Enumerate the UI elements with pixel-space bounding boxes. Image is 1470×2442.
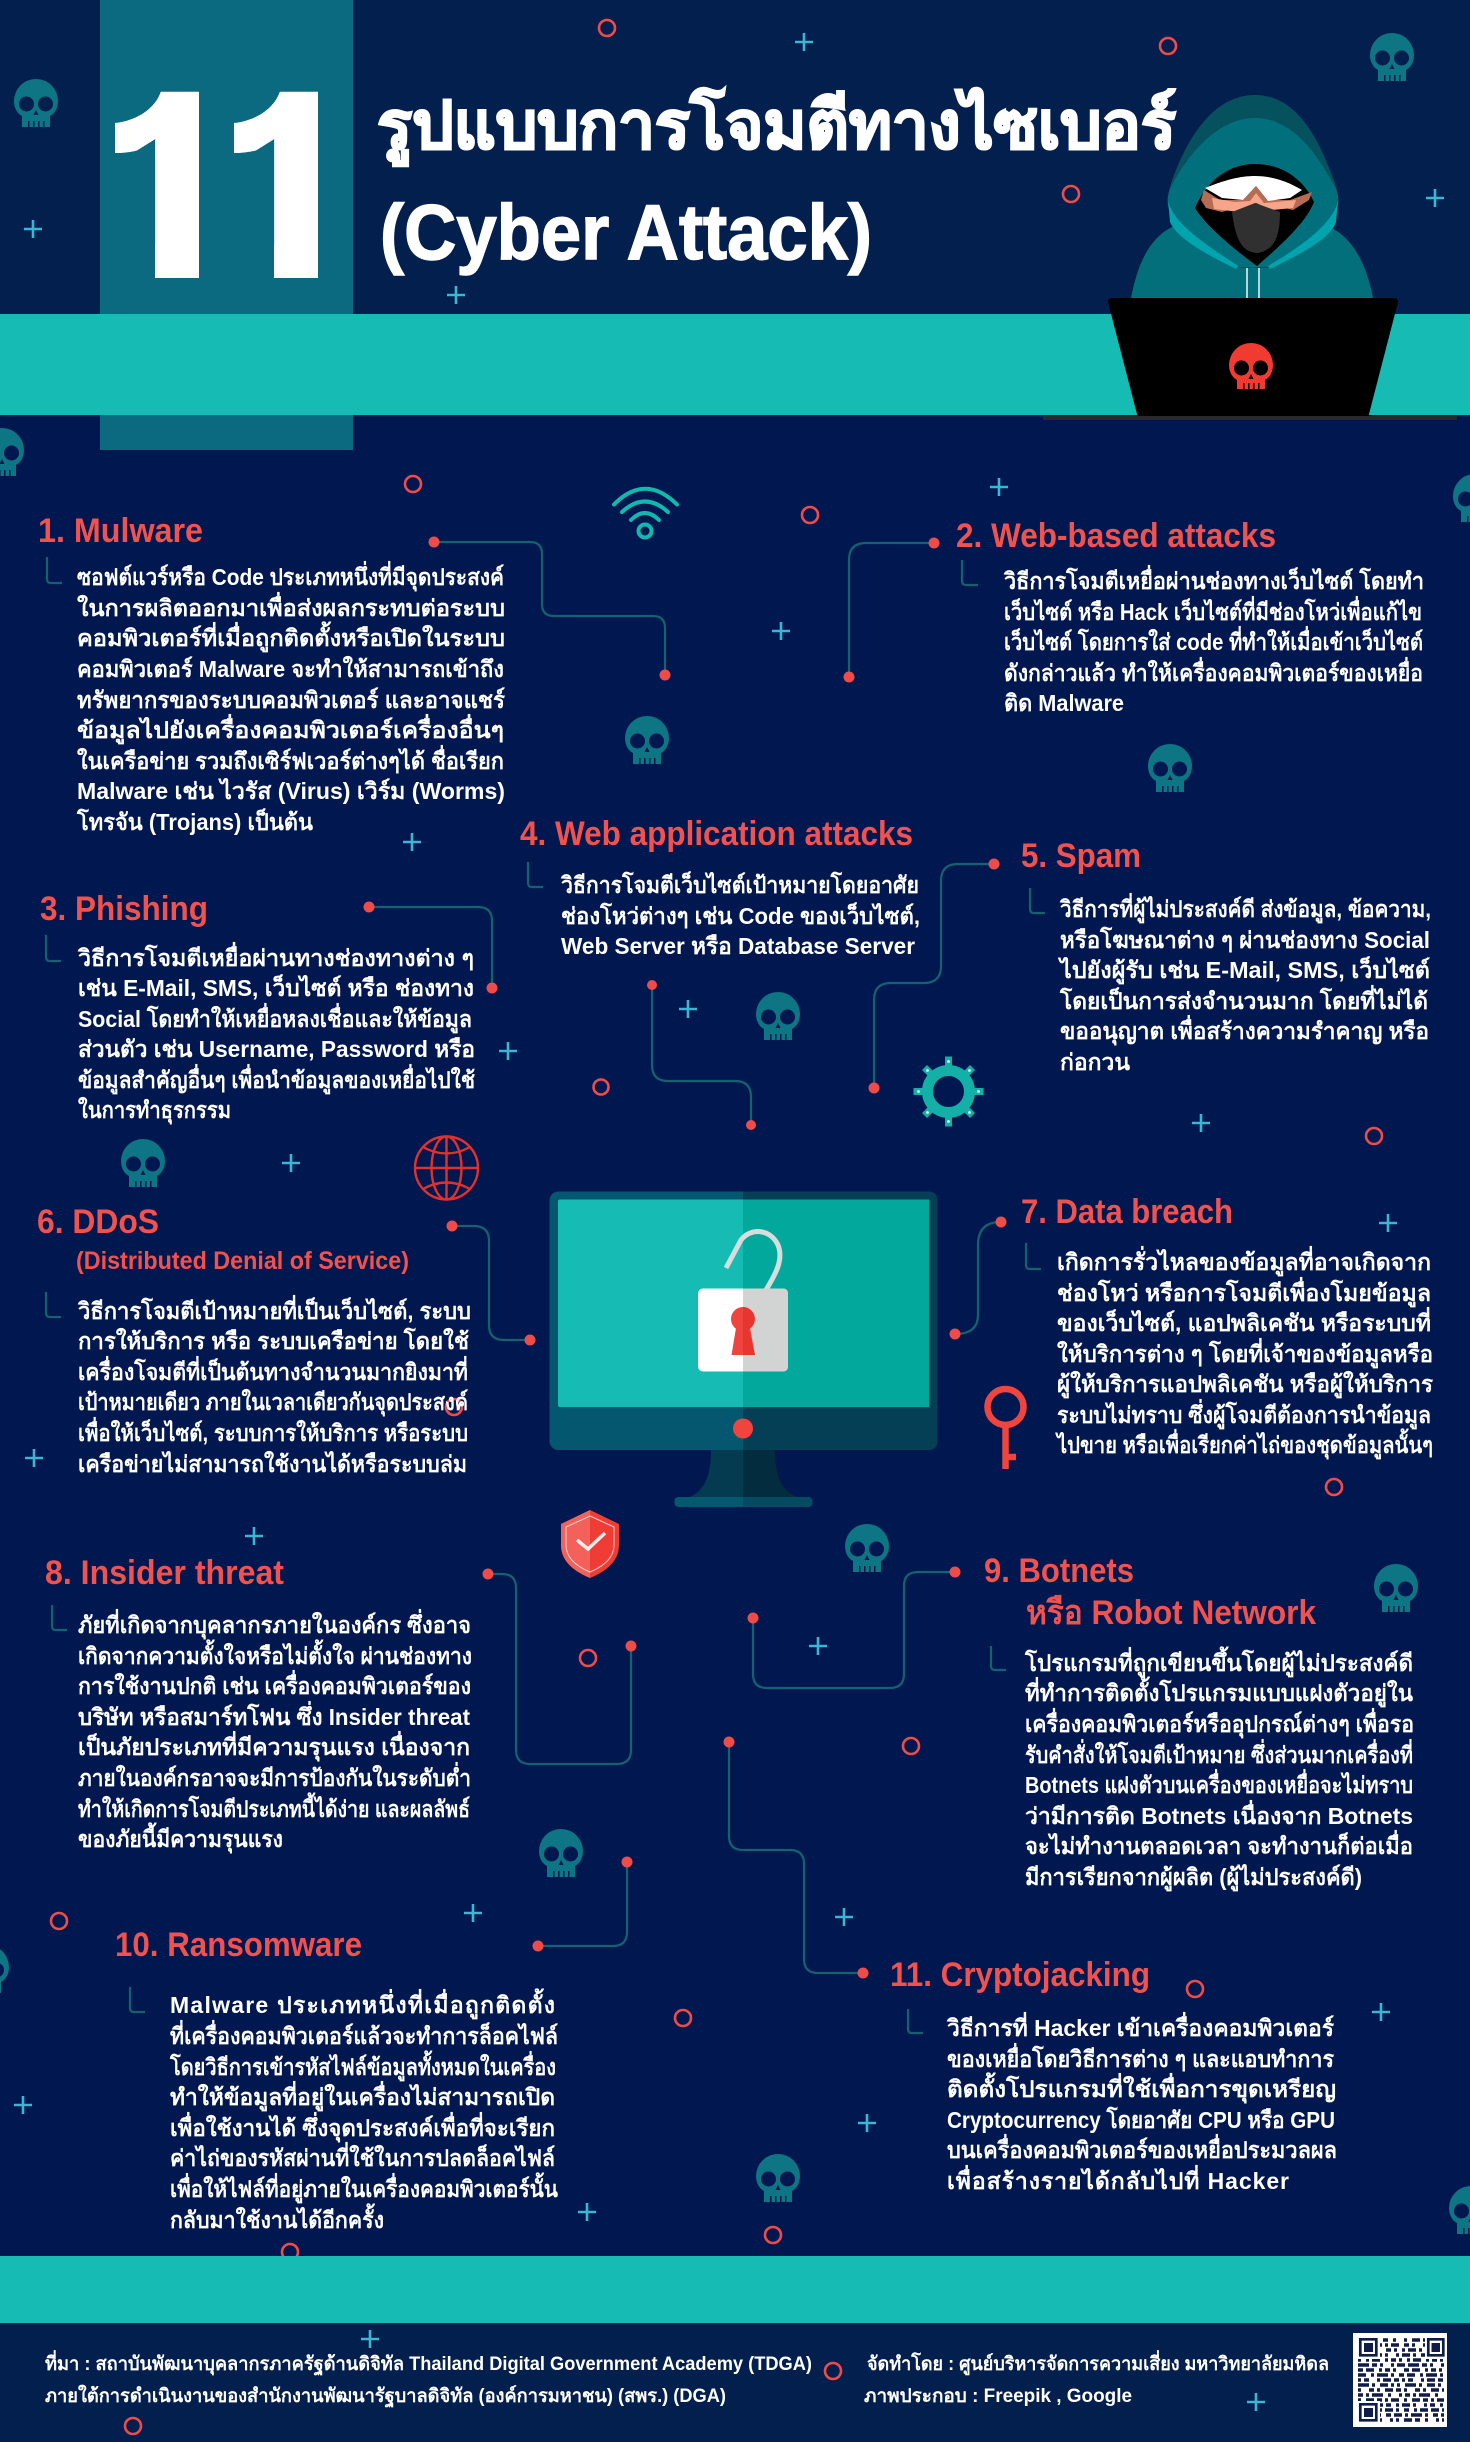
text block: ข้อมูลไปยังเครื่องคอมพิวเตอร์เครื่องอื่นๆ	[77, 713, 504, 745]
icon: wifi	[614, 489, 677, 538]
heading: 6. DDoS	[37, 1203, 159, 1241]
heading: 11. Cryptojacking	[890, 1956, 1150, 1994]
heading line 2: หรือ Robot Network	[1026, 1594, 1316, 1632]
text block: Cryptocurrency โดยอาศัย CPU หรือ GPU	[947, 2106, 1335, 2133]
text block: วิธีการโจมตีเป้าหมายที่เป็นเว็บไซต์, ระบบ	[77, 1294, 471, 1324]
text block: เครือข่ายไม่สามารถใช้งานได้หรือระบบล่ม	[78, 1450, 467, 1477]
bracket mark	[1026, 1243, 1041, 1269]
bracket mark	[908, 2009, 923, 2033]
panel: 4. Web application attacks	[520, 815, 920, 959]
text block: วิธีการที่ Hacker เข้าเครื่องคอมพิวเตอร์	[946, 2011, 1335, 2041]
heading: 1. Mulware	[38, 512, 203, 550]
text block	[1024, 1646, 1414, 1892]
bracket mark	[130, 1987, 145, 2012]
text block	[76, 560, 506, 835]
text block: เช่น E-Mail, SMS, เว็บไซต์ หรือ ช่องทาง	[78, 973, 474, 1001]
text block	[77, 1294, 471, 1477]
heading: 4. Web application attacks	[520, 815, 913, 853]
bracket mark	[47, 557, 62, 583]
text block: รับคำสั่งให้โจมตีเป้าหมาย ซึ่งส่วนมากเครื่องที่	[1025, 1738, 1413, 1768]
text block: ก่อกวน	[1060, 1049, 1130, 1075]
text block: ในการทำธุรกรรม	[78, 1096, 231, 1125]
text block: คอมพิวเตอร์ Malware จะทำให้สามารถเข้าถึง	[77, 655, 504, 682]
text block: Malware ประเภทหนึ่งที่เมื่อถูกติดตั้ง	[170, 1988, 555, 2020]
panel: 1. Mulware	[38, 512, 506, 835]
footer teal band	[0, 2256, 1470, 2323]
icon: laptop skull	[1229, 343, 1273, 389]
bracket mark	[991, 1646, 1006, 1670]
text block: เป้าหมายเดียว ภายในเวลาเดียวกันจุดประสงค์	[78, 1388, 468, 1417]
text block: ทรัพยากรของระบบคอมพิวเตอร์ และอาจแชร์	[77, 687, 506, 713]
text block: เว็บไซต์ หรือ Hack เว็บไซต์ที่มีช่องโหว่เพื่อแก้ไข	[1004, 595, 1422, 625]
padlock	[698, 1232, 788, 1372]
teal header band	[0, 314, 1470, 415]
heading: 9. Botnets	[984, 1552, 1134, 1590]
text block: ขออนุญาต เพื่อสร้างความรำคาญ หรือ	[1060, 1014, 1429, 1046]
text block: เพื่อให้เว็บไซต์, ระบบการให้บริการ หรือระบบ	[78, 1416, 468, 1446]
text block: หรือโฆษณาต่าง ๆ ผ่านช่องทาง Social	[1060, 926, 1430, 953]
text block: ติด Malware	[1004, 690, 1124, 716]
text block: ที่ทำการติดตั้งโปรแกรมแบบแฝงตัวอยู่ใน	[1025, 1676, 1413, 1708]
text block: ในการผลิตออกมาเพื่อส่งผลกระทบต่อระบบ	[77, 591, 505, 621]
text block	[169, 1988, 558, 2233]
text block: ติดตั้งโปรแกรมที่ใช้เพื่อการขุดเหรียญ	[947, 2072, 1336, 2104]
heading: 8. Insider threat	[45, 1554, 284, 1592]
text block: วิธีการโจมตีเว็บไซต์เป้าหมายโดยอาศัย	[560, 870, 919, 898]
panel: 6. DDoS	[37, 1203, 471, 1477]
text block: วิธีการที่ผู้ไม่ประสงค์ดี ส่งข้อมูล, ข้อความ,	[1059, 892, 1431, 924]
heading: 2. Web-based attacks	[956, 517, 1276, 555]
text block: ทำให้เกิดการโจมตีประเภทนี้ได้ง่าย และผลลัพธ์	[78, 1792, 470, 1822]
text block: ข้อมูลสำคัญอื่นๆ เพื่อนำข้อมูลของเหยื่อไปใช้	[78, 1063, 475, 1095]
connector: 8	[482, 1568, 636, 1764]
text block: การใช้งานปกติ เช่น เครื่องคอมพิวเตอร์ของ	[78, 1669, 471, 1699]
text block: ช่องโหว่ หรือการโจมตีเพื่องโมยข้อมูล	[1057, 1276, 1431, 1308]
connector: 9	[748, 1566, 960, 1688]
panel: 11. Cryptojacking	[890, 1956, 1337, 2194]
bracket mark	[46, 935, 61, 961]
text block: ของเว็บไซต์, แอปพลิเคชัน หรือระบบที่	[1057, 1306, 1431, 1336]
text block: กลับมาใช้งานได้อีกครั้ง	[170, 2203, 384, 2233]
panel: 10. Ransomware	[115, 1926, 558, 2233]
connector: 1	[428, 536, 670, 680]
text block: โทรจัน (Trojans) เป็นต้น	[76, 807, 313, 835]
text block: ที่เครื่องคอมพิวเตอร์แล้วจะทำการล็อคไฟล์	[170, 2019, 558, 2049]
text block: ว่ามีการติด Botnets เนื่องจาก Botnets	[1025, 1799, 1413, 1829]
text block	[946, 2011, 1337, 2194]
teal column behind number	[100, 0, 353, 450]
text block: ไปยังผู้รับ เช่น E-Mail, SMS, เว็บไซต์	[1057, 955, 1430, 985]
text block: เพื่อใช้งานได้ ซึ่งจุดประสงค์เพื่อที่จะเรียก	[170, 2111, 555, 2143]
panel: 3. Phishing	[40, 890, 475, 1125]
panel: 7. Data breach	[1021, 1193, 1434, 1460]
text block: โดยวิธีการเข้ารหัสไฟล์ข้อมูลทั้งหมดในเครื่อง	[169, 2050, 556, 2082]
panel: 2. Web-based attacks	[956, 517, 1424, 716]
text block: ในเครือข่าย รวมถึงเซิร์ฟเวอร์ต่างๆได้ ชื่อเรียก	[77, 744, 504, 774]
text block: บนเครื่องคอมพิวเตอร์ของเหยื่อประมวลผล	[947, 2133, 1337, 2163]
title Thai line: รูปแบบการโจมตีทางไซเบอร์	[377, 86, 1176, 167]
text block: ของภัยนี้มีความรุนแรง	[78, 1822, 283, 1854]
text block	[1054, 1245, 1434, 1460]
text block: โปรแกรมที่ถูกเขียนขึ้นโดยผู้ไม่ประสงค์ดี	[1024, 1646, 1413, 1678]
text block: วิธีการโจมตีเหยื่อผ่านช่องทางเว็บไซต์ โดยทำ	[1003, 564, 1424, 594]
text block: ภัยที่เกิดจากบุคลากรภายในองค์กร ซึ่งอาจ	[78, 1608, 471, 1640]
connector: 4	[647, 980, 756, 1130]
icon: key	[988, 1389, 1024, 1469]
text block: เกิดจากความตั้งใจหรือไม่ตั้งใจ ผ่านช่องทาง	[78, 1639, 472, 1669]
text block	[78, 1608, 472, 1854]
text block: ช่องโหว่ต่างๆ เช่น Code ของเว็บไซต์,	[561, 901, 920, 929]
source text line 2: ภายใต้การดำเนินงานของสำนักงานพัฒนารัฐบาลดิจิทัล (องค์การมหาชน) (สพร.) (DGA)	[45, 2384, 726, 2409]
connector: 6	[446, 1220, 536, 1346]
bracket mark	[46, 1292, 61, 1317]
icon: shield	[561, 1510, 619, 1578]
panel: 8. Insider threat	[45, 1554, 472, 1854]
text block: Malware เช่น ไวรัส (Virus) เวิร์ม (Worms)	[77, 777, 505, 804]
text block: ส่วนตัว เช่น Username, Password หรือ	[78, 1036, 475, 1062]
text block: Botnets แฝงตัวบนเครื่องของเหยื่อจะไม่ทราบ	[1025, 1768, 1413, 1798]
connector: 2	[844, 538, 940, 682]
panel: 5. Spam	[1021, 837, 1431, 1075]
icon: hooded hacker with laptop	[1043, 95, 1457, 420]
subheading: (Distributed Denial of Service)	[76, 1247, 409, 1275]
text block: วิธีการโจมตีเหยื่อผ่านทางช่องทางต่าง ๆ	[77, 941, 474, 971]
text block: เครื่องโจมตีที่เป็นต้นทางจำนวนมากยิงมาที่	[78, 1355, 468, 1385]
text block: เพื่อสร้างรายได้กลับไปที่ Hacker	[947, 2164, 1289, 2194]
image credit text: ภาพประกอบ : Freepik , Google	[864, 2386, 1132, 2407]
text block: เพื่อให้ไฟล์ที่อยู่ภายในเครื่องคอมพิวเตอร์นั้น	[170, 2172, 558, 2204]
header background	[0, 0, 1470, 314]
text block: เครื่องคอมพิวเตอร์หรืออุปกรณ์ต่างๆ เพื่อรอ	[1025, 1707, 1414, 1739]
footer panel	[0, 2323, 1470, 2442]
text block	[1057, 892, 1431, 1075]
text block: เว็บไซต์ โดยการใส่ code ที่ทำให้เมื่อเข้าเว็บไซต์	[1004, 625, 1423, 655]
text block: จะไม่ทำงานตลอดเวลา จะทำงานก็ต่อเมื่อ	[1025, 1829, 1413, 1859]
text block: ทำให้ข้อมูลที่อยู่ในเครื่องไม่สามารถเปิด	[170, 2080, 555, 2112]
text block: คอมพิวเตอร์ที่เมื่อถูกติดตั้งหรือเปิดในระบบ	[77, 621, 505, 653]
text block: โดยเป็นการส่งจำนวนมาก โดยที่ไม่ได้	[1059, 984, 1428, 1014]
source text: ที่มา : สถาบันพัฒนาบุคลากรภาครัฐด้านดิจิทัล Thailand Digital Government Academy (TDGA)	[45, 2350, 812, 2377]
text block: ค่าไถ่ของรหัสผ่านที่ใช้ในการปลดล็อคไฟล์	[170, 2141, 555, 2171]
text block: เกิดการรั่วไหลของข้อมูลที่อาจเกิดจาก	[1057, 1245, 1431, 1277]
title English line: (Cyber Attack)	[380, 188, 872, 276]
text block: ดังกล่าวแล้ว ทำให้เครื่องคอมพิวเตอร์ของเหยื่อ	[1004, 656, 1423, 686]
text block: เป็นภัยประเภทที่มีความรุนแรง เนื่องจาก	[78, 1730, 470, 1762]
title number 11: 11	[100, 41, 365, 334]
text block: ซอฟต์แวร์หรือ Code ประเภทหนึ่งที่มีจุดประสงค์	[77, 560, 504, 592]
connector: 5	[868, 858, 1000, 1094]
connector: 7	[950, 1216, 1006, 1340]
text block: Social โดยทำให้เหยื่อหลงเชื่อและให้ข้อมูล	[78, 1002, 472, 1034]
heading: 7. Data breach	[1021, 1193, 1233, 1231]
panel: 9. Botnets	[984, 1552, 1414, 1892]
text block: ผู้ให้บริการแอปพลิเคชัน หรือผู้ให้บริการ	[1057, 1370, 1434, 1399]
text block: มีการเรียกจากผู้ผลิต (ผู้ไม่ประสงค์ดี)	[1025, 1863, 1362, 1892]
text block: ให้บริการต่าง ๆ โดยที่เจ้าของข้อมูลหรือ	[1057, 1337, 1433, 1369]
text block	[77, 941, 475, 1125]
monitor with open padlock	[550, 1192, 938, 1507]
connector: 11	[724, 1736, 868, 1978]
connector: 10	[532, 1856, 632, 1952]
heading: 3. Phishing	[40, 890, 208, 928]
text block: ระบบไม่ทราบ ซึ่งผู้โจมตีต้องการนำข้อมูล	[1057, 1398, 1431, 1430]
text block: ของเหยื่อโดยวิธีการต่าง ๆ และแอบทำการ	[947, 2042, 1335, 2072]
icon: gear	[914, 1056, 984, 1126]
icon: globe	[415, 1136, 478, 1200]
text block: Web Server หรือ Database Server	[561, 933, 915, 959]
text block: การให้บริการ หรือ ระบบเครือข่าย โดยใช้	[78, 1327, 469, 1354]
heading: 10. Ransomware	[115, 1926, 362, 1964]
connector: 3	[364, 902, 498, 994]
heading: 5. Spam	[1021, 837, 1141, 875]
QR code	[1353, 2333, 1447, 2427]
bracket mark	[962, 560, 978, 585]
bracket mark	[52, 1605, 67, 1630]
bracket mark	[528, 862, 543, 887]
organiser text: จัดทำโดย : ศูนย์บริหารจัดการความเสี่ยง มหาวิทยาลัยมหิดล	[867, 2350, 1329, 2376]
text block: บริษัท หรือสมาร์ทโฟน ซึ่ง Insider threat	[78, 1700, 470, 1730]
text block	[1003, 564, 1424, 716]
text block: ภายในองค์กรอาจจะมีการป้องกันในระดับต่ำ	[78, 1761, 471, 1791]
bracket mark	[1030, 888, 1045, 913]
text block	[560, 870, 920, 959]
